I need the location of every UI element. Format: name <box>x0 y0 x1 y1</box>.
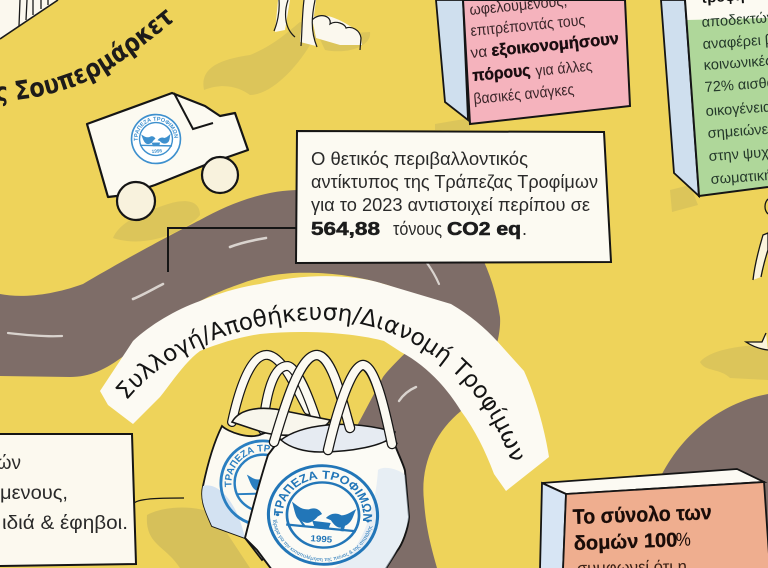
panel: orange box: δομών 100 <box>573 529 678 555</box>
back bag logo <box>219 440 273 524</box>
panel: pink box: επιτρέποντάς τους <box>470 12 586 40</box>
panel: lower left text box <box>0 434 184 566</box>
front bag handles <box>274 355 392 450</box>
front bag body <box>245 434 409 568</box>
panel: pink box <box>436 0 630 124</box>
callout: CO2 environmental impact: αντίκτυπος της Τράπεζας Τροφίμων <box>311 172 598 192</box>
back bag body <box>202 420 360 560</box>
panel: pink box: για άλλες <box>535 58 593 80</box>
callout: CO2 environmental impact: CO2 eq <box>447 219 521 239</box>
panel: orange box: % <box>675 529 691 551</box>
callout: CO2 environmental impact: τόνους <box>393 219 442 239</box>
road: main winding road <box>0 190 746 568</box>
panel: pink box: πόρους <box>472 62 531 85</box>
panel: orange box <box>540 469 768 568</box>
road dash marks <box>8 238 746 459</box>
front bag logo <box>266 464 380 566</box>
callout: CO2 environmental impact: Ο θετικός περιβαλλοντικός <box>311 149 528 169</box>
front bag logo: Ίδρυμα για την καταπολέμηση της πείνας & της σπατάλης <box>272 519 373 562</box>
van wheels <box>117 182 155 220</box>
back bag logo: ΤΡΑΠΕΖΑ ΤΡΟΦΙΜΩΝ <box>224 444 273 488</box>
panel: pink box: βασικές ανάγκες <box>473 81 575 108</box>
panel: orange box: Το σύνολο των <box>572 501 712 529</box>
front bag logo: 1995 <box>310 534 332 545</box>
callout: CO2 environmental impact: . <box>522 219 527 239</box>
callout: CO2 environmental impact <box>296 131 611 263</box>
panel: green box <box>661 0 768 196</box>
trees and bush <box>274 0 362 50</box>
van logo: ΤΡΑΠΕΖΑ ΤΡΟΦΙΜΩΝ <box>134 116 178 141</box>
top-left building <box>0 0 58 39</box>
connector: callout to road <box>168 228 297 272</box>
van logo: 1995 <box>151 148 163 154</box>
panel: lower left text box: ιδιά & έφηβοι. <box>2 513 128 534</box>
figure: person at right edge <box>746 199 768 350</box>
panel: lower left text box: μενους, <box>0 483 68 504</box>
callout: CO2 environmental impact: 564,88 <box>311 219 380 239</box>
panel: pink box: να εξοικονομήσουν <box>470 30 620 62</box>
curved banner: Συλλογή/Αποθήκευση/Διανομή Τροφίμων <box>115 304 523 460</box>
road: right section <box>640 394 768 568</box>
callout: CO2 environmental impact: για το 2023 αντιστοιχεί περίπου σε <box>311 195 590 215</box>
shopping bags <box>201 350 410 568</box>
van logo <box>130 114 182 164</box>
back bag handles <box>232 355 318 430</box>
front bag logo: ΤΡΑΠΕΖΑ ΤΡΟΦΙΜΩΝ <box>274 470 372 522</box>
icon: delivery van <box>86 92 250 222</box>
